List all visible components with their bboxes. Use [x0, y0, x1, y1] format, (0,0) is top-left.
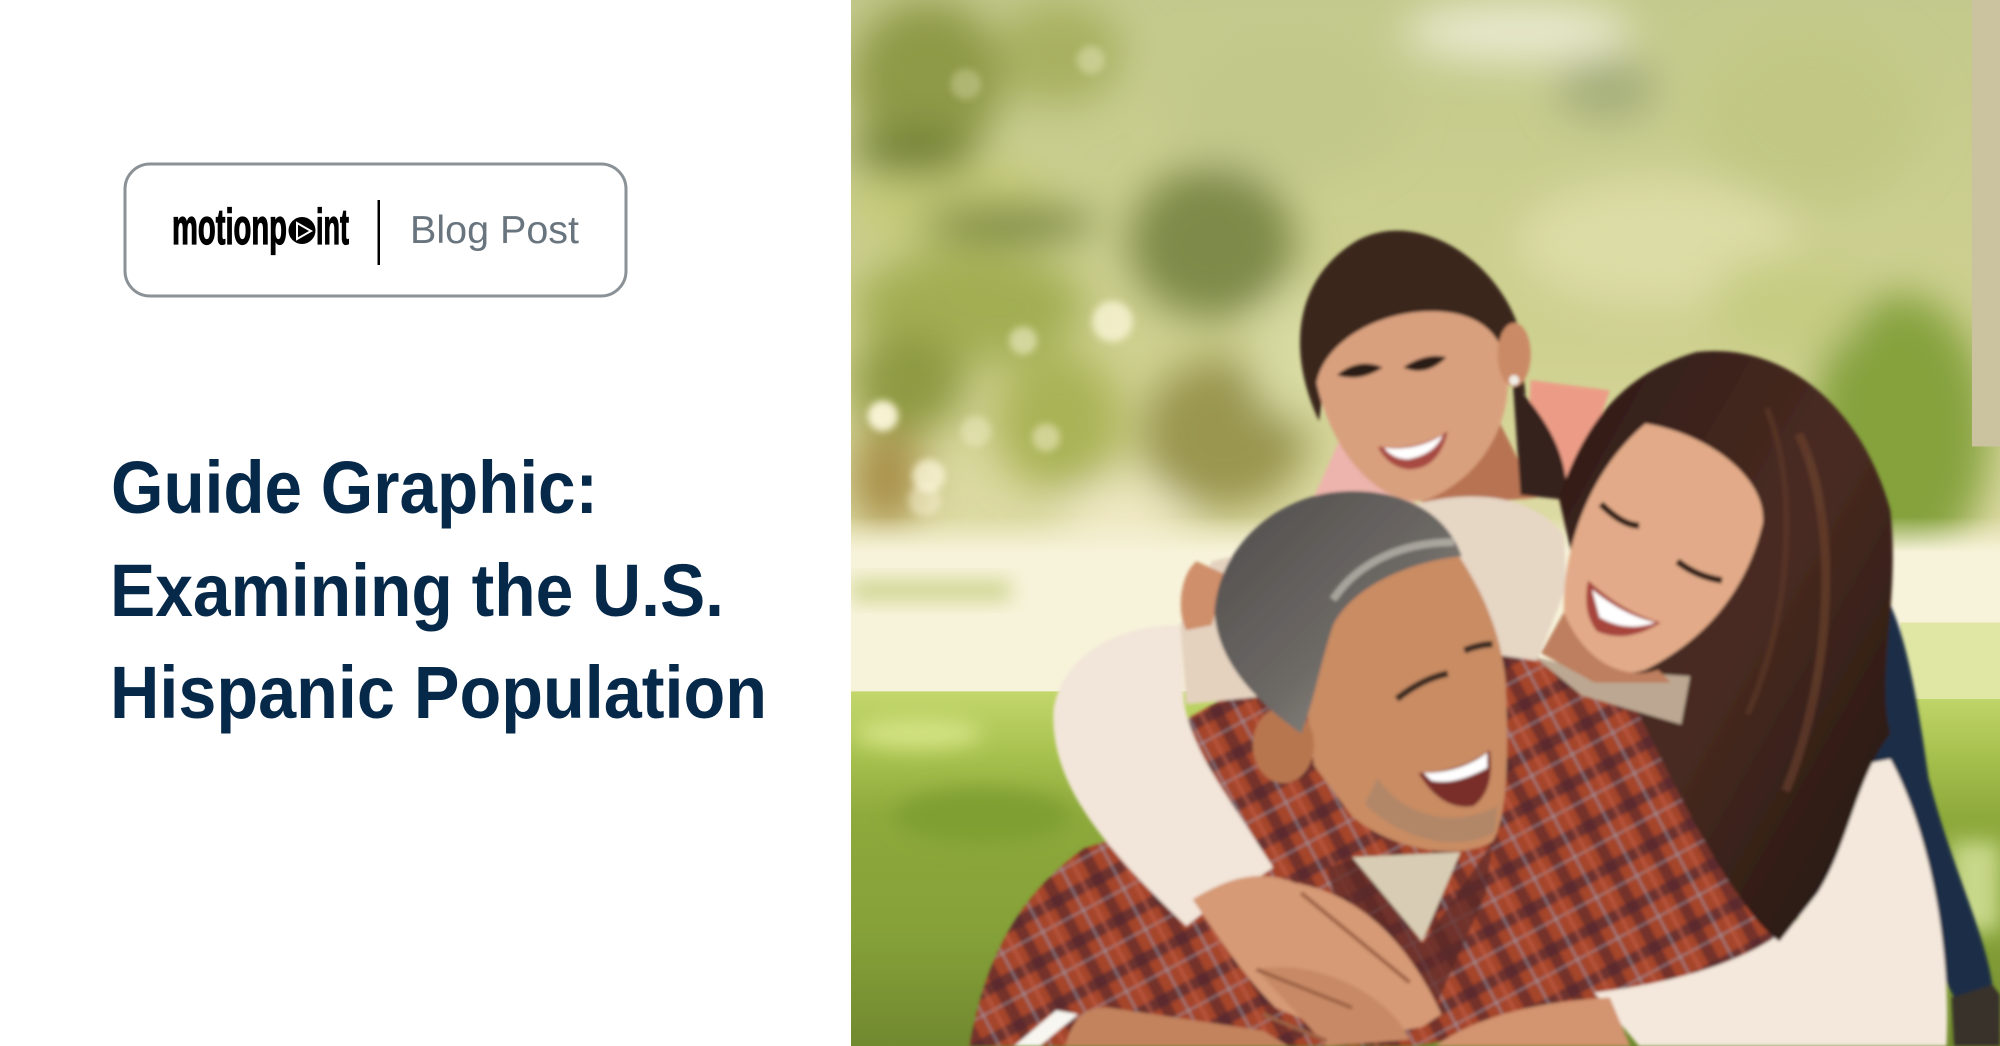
dark shirt shadow band	[1327, 842, 1492, 1008]
figures	[970, 231, 2000, 1046]
father's undershirt	[1352, 852, 1461, 941]
path and grass	[851, 517, 2000, 695]
title: Examining the U.S.	[110, 549, 724, 632]
father's head	[1214, 491, 1507, 851]
logo divider	[378, 200, 380, 265]
mother's hair	[1559, 351, 1893, 941]
panel: left white background	[0, 0, 851, 1046]
title	[110, 446, 767, 734]
photo: smiling family lying on grass in a park	[851, 0, 2000, 1046]
mother's face	[1541, 424, 1763, 682]
jeans: mother's legs	[1869, 580, 1992, 998]
father's plaid shirt	[970, 651, 1811, 1046]
photo background: park	[851, 0, 2000, 1046]
label: Blog Post: Blog Post	[410, 209, 579, 252]
badge: MotionPoint Blog Post	[125, 164, 626, 296]
mother's shoulder and sweater	[1053, 497, 1690, 926]
title: Guide Graphic:	[111, 446, 598, 529]
title: Hispanic Population	[110, 651, 767, 734]
logo: motionpoint: motionp	[172, 199, 287, 255]
girl	[1300, 231, 1610, 508]
logo: motionpoint: int	[316, 199, 349, 255]
hands	[1014, 876, 1630, 1046]
shoe	[1952, 985, 2000, 1046]
mother's right sleeve	[1594, 759, 1947, 1046]
